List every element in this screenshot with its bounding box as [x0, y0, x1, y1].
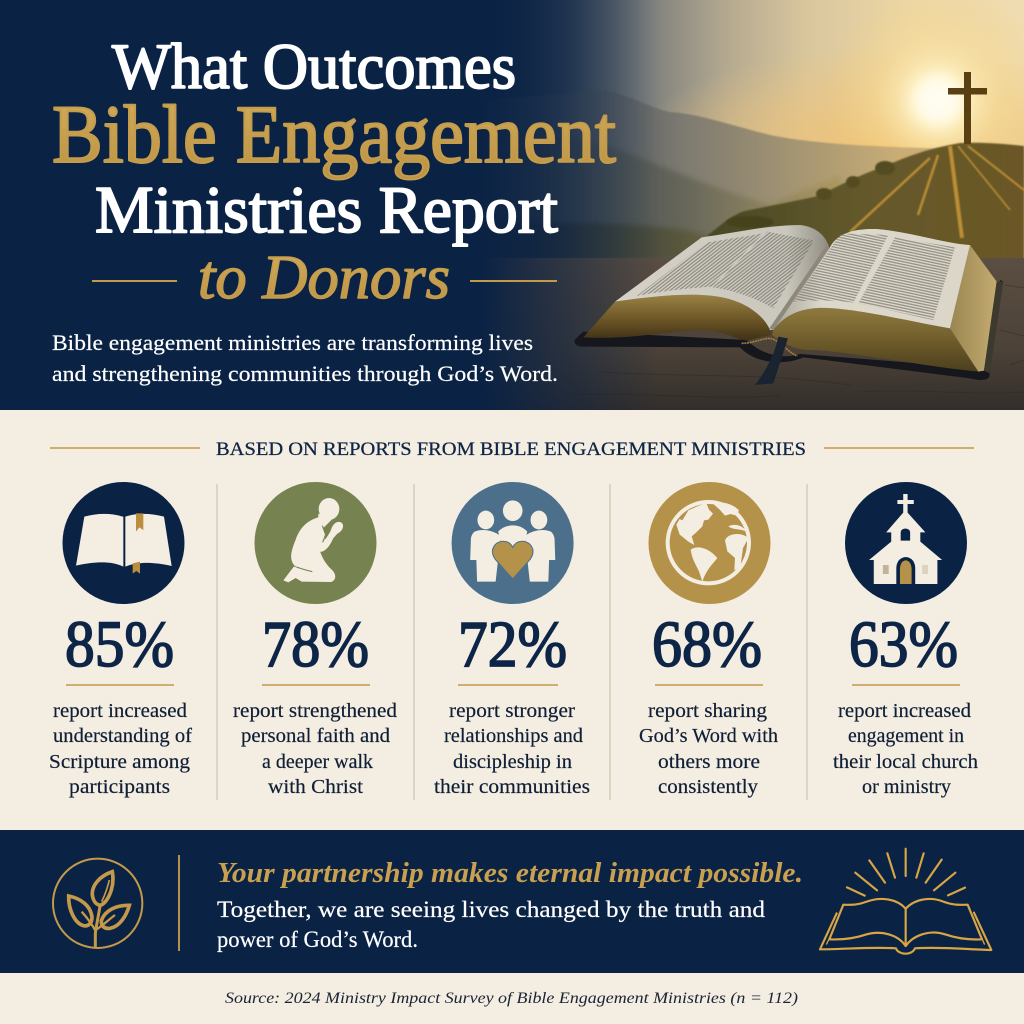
table [480, 258, 1024, 410]
stat: 72%: 72% [458, 608, 567, 681]
partnership banner [0, 830, 1024, 973]
icon: globe [648, 482, 770, 604]
photo: sunrise hillside with cross [480, 0, 1024, 410]
subtitle: and strengthening communities through God’s Word. [52, 361, 558, 386]
column 2: strengthened faith [233, 482, 397, 798]
title: to Donors [198, 244, 450, 312]
icon: open book [62, 482, 184, 604]
icon: three people with heart [452, 482, 574, 604]
description 2: report strengthened [233, 700, 397, 722]
cross [948, 72, 987, 144]
icon: church [845, 482, 967, 604]
description 5: or ministry [862, 776, 951, 798]
description 3: discipleship in [453, 751, 572, 773]
source note: Source: 2024 Ministry Impact Survey of Bible Engagement Ministries (n = 112) [225, 990, 798, 1007]
title: What Outcomes [112, 31, 516, 103]
stat: 68%: 68% [652, 608, 762, 681]
column 5: church engagement [833, 482, 978, 798]
subtitle: Bible engagement ministries are transforming lives [52, 330, 533, 355]
title: Bible Engagement [52, 88, 616, 180]
stat: 78%: 78% [262, 608, 369, 681]
subtitle [52, 330, 558, 386]
section heading: BASED ON REPORTS FROM BIBLE ENGAGEMENT MINISTRIES [216, 440, 806, 460]
description 4: report sharing [648, 700, 767, 722]
description 5: report increased [838, 700, 971, 722]
open Bible [575, 225, 1003, 385]
description 3 [434, 700, 590, 798]
column 1: understanding of Scripture [49, 482, 192, 798]
description 2: a deeper walk [262, 751, 373, 773]
icon: kneeling figure in prayer [254, 482, 376, 604]
description 4 [639, 700, 778, 798]
description 4: others more [658, 751, 760, 773]
header panel [0, 0, 1024, 410]
callout text: Together, we are seeing lives changed by the truth and [217, 897, 766, 922]
hill [708, 143, 1024, 262]
description 1: report increased [53, 700, 187, 722]
callout text: power of God’s Word. [217, 927, 418, 952]
description 1: understanding of [53, 725, 192, 747]
description 1: Scripture among [49, 751, 190, 773]
description 3: relationships and [444, 725, 583, 747]
page text columns [637, 232, 955, 320]
description 1 [49, 700, 192, 798]
description 5 [833, 700, 978, 798]
stat: 85%: 85% [65, 608, 174, 681]
sun rays on the hill [850, 146, 1024, 238]
description 2: with Christ [268, 776, 363, 798]
stat: 63%: 63% [849, 608, 958, 681]
description 3: their communities [434, 776, 590, 798]
description 2: personal faith and [241, 725, 390, 747]
title [52, 31, 616, 312]
left navy fade [480, 0, 660, 410]
icon: open book with rays [820, 849, 991, 954]
description 3: report stronger [449, 700, 575, 722]
description 4: God’s Word with [639, 725, 778, 747]
column 3: relationships [434, 482, 590, 798]
description 5: engagement in [848, 725, 964, 747]
description 5: their local church [833, 751, 978, 773]
description 4: consistently [658, 776, 758, 798]
title flourish lines [92, 280, 557, 282]
sun glow [914, 76, 962, 124]
title: Ministries Report [95, 173, 558, 247]
description 2 [233, 700, 397, 798]
callout text [217, 897, 766, 952]
callout heading: Your partnership makes eternal impact possible. [217, 857, 803, 889]
description 1: participants [69, 776, 170, 798]
icon: plant in circle [53, 859, 142, 948]
column 4: sharing God's Word [639, 482, 778, 798]
